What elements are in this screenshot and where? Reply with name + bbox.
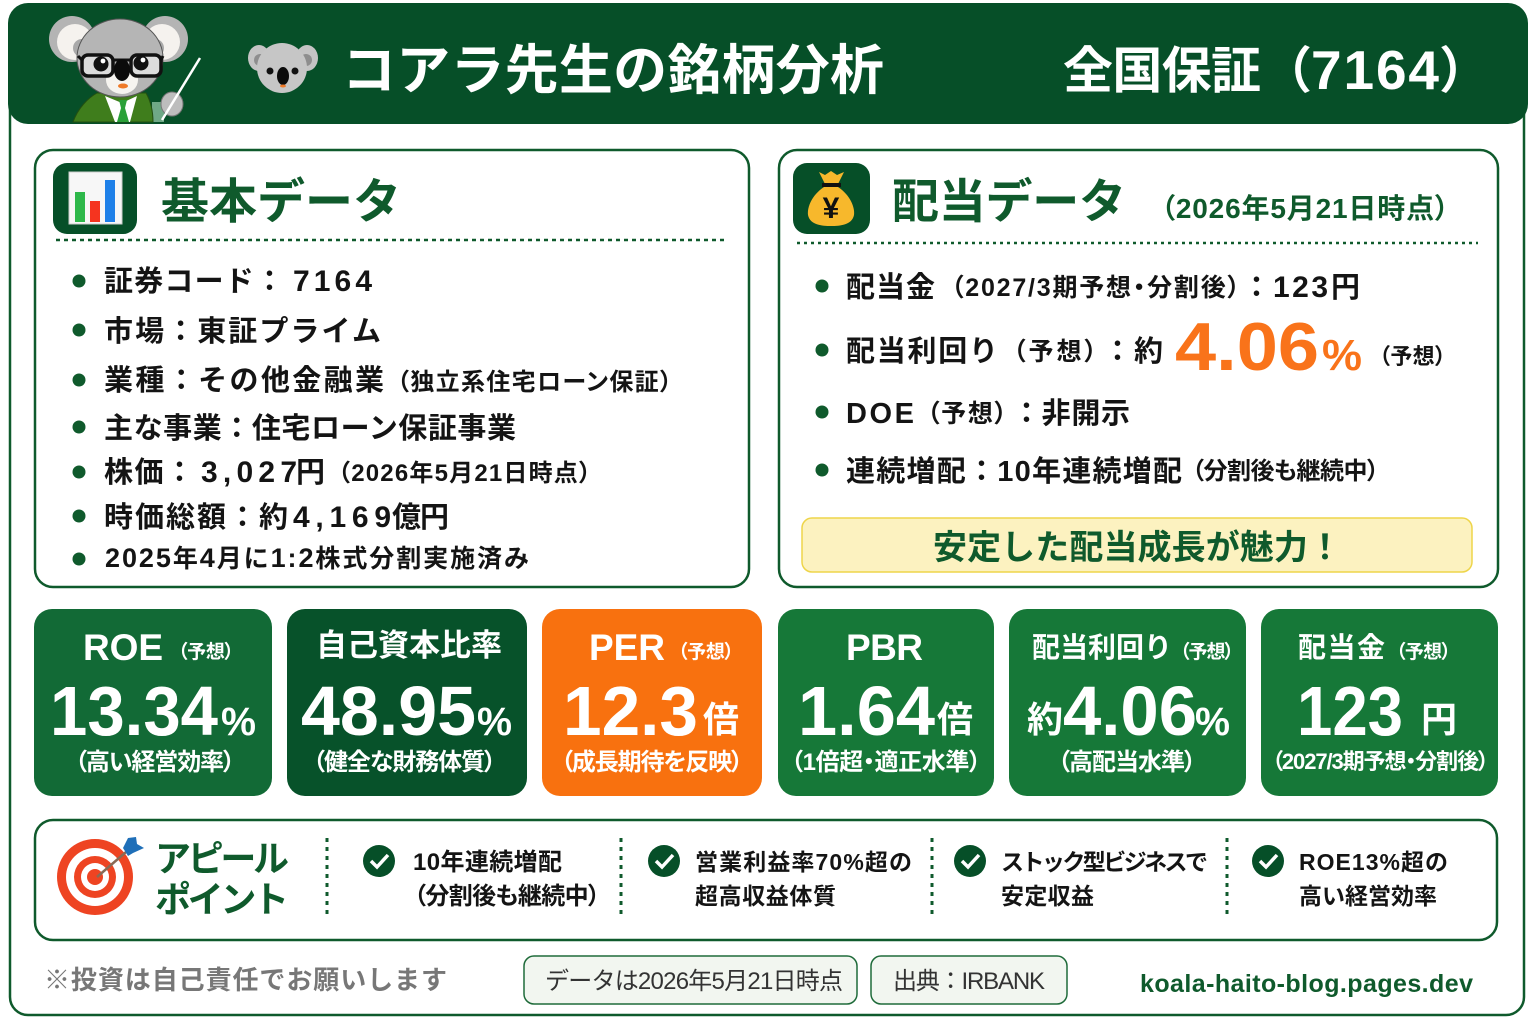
card: dividend yield: 4.06 [1063, 672, 1197, 750]
list: dividend data [816, 271, 1446, 488]
card: equity ratio: 48.95 [301, 672, 476, 750]
list: dividend data: DOE [846, 398, 914, 430]
list: basic data: 2025年4月に1:2株式分割実施済み [105, 543, 529, 573]
header band [8, 3, 1528, 124]
list: dividend data: 4.06 [1175, 309, 1319, 385]
list: dividend data: 円 [1331, 272, 1360, 304]
callout: stable dividend growth [802, 518, 1472, 572]
card: dividend yield: 約 [1027, 699, 1063, 740]
card: dividend yield [1009, 609, 1246, 796]
card: PER: （予想） [678, 641, 734, 663]
panel: appeal points [35, 820, 1497, 940]
list: basic data: 業種：その他金融業 [104, 364, 384, 397]
list: basic data: 3,027 [201, 456, 297, 489]
card: dividend yield: % [1195, 700, 1230, 744]
icon: money bag: ¥ [823, 192, 840, 225]
card: dividend: （2027/3期予想・分割後） [1272, 749, 1489, 774]
card: PBR [778, 609, 994, 796]
heading: basic data: 基本データ [161, 176, 401, 229]
stock name [1063, 39, 1489, 101]
list: dividend data: 配当金 [846, 271, 935, 304]
card: dividend: 円 [1421, 699, 1457, 740]
point 4: 高い経営効率 [1299, 883, 1437, 909]
icon: money bag [793, 163, 870, 234]
card: dividend [1261, 609, 1498, 796]
list: dividend data: ：約 [1103, 335, 1163, 368]
card: ROE: % [221, 700, 256, 744]
card: dividend yield: （高配当水準） [1058, 749, 1196, 776]
list: dividend data: ： [1242, 272, 1271, 304]
point 4 [1252, 845, 1448, 909]
point 2: 超高収益体質 [695, 883, 836, 909]
footer source badge: 出典：IRBANK [893, 968, 1045, 995]
footer source badge [871, 956, 1067, 1004]
point 1: （分割後も継続中） [414, 883, 600, 910]
point 1 [363, 845, 600, 910]
card: PBR: 1.64 [798, 672, 935, 750]
list: basic data: （独立系住宅ローン保証） [397, 369, 672, 396]
icon: koala teacher [49, 16, 200, 122]
footer disclaimer: ※投資は自己責任でお願いします [44, 965, 447, 995]
point 2 [648, 845, 912, 909]
card: PER: 倍 [703, 699, 739, 740]
footer url: koala-haito-blog.pages.dev [1140, 970, 1473, 998]
card: ROE: ROE [83, 627, 163, 668]
list: basic data: 4,169 [293, 501, 391, 534]
card: PER: （成長期待を反映） [561, 749, 743, 776]
card: ROE: 13.34 [50, 672, 218, 750]
card: PER [542, 609, 762, 796]
card: equity ratio: 自己資本比率 [316, 628, 502, 663]
list: basic data: （2026年5月21日時点） [338, 460, 591, 487]
footer date badge: データは2026年5月21日時点 [545, 968, 843, 995]
card: dividend yield: （予想） [1180, 641, 1234, 663]
list: basic data: 円 [296, 457, 325, 489]
list: basic data: 7164 [293, 265, 372, 298]
list: dividend data: 123 [1273, 271, 1328, 304]
point 3 [954, 845, 1208, 909]
list: dividend data: 連続増配：10年連続増配 [846, 455, 1182, 488]
card: PBR: （1倍超・適正水準） [791, 749, 981, 776]
card: equity ratio [287, 609, 527, 796]
heading: dividend data: 配当データ [892, 175, 1126, 228]
point 2: 営業利益率70%超の [695, 849, 912, 875]
list: basic data: 株価： [104, 456, 194, 489]
icon: bar chart [53, 163, 137, 234]
list: dividend data: % [1322, 331, 1362, 380]
heading: appeal points [155, 838, 289, 920]
card: PBR: 倍 [937, 699, 973, 740]
card: dividend: 配当金 [1298, 632, 1385, 663]
list: dividend data: （予想） [1013, 338, 1097, 366]
list: basic data: 証券コード： [104, 265, 284, 298]
card: dividend: （予想） [1396, 641, 1451, 663]
list: basic data: 億円 [392, 501, 449, 534]
card: PER: PER [589, 627, 665, 668]
panel: basic data [35, 150, 749, 587]
heading: appeal points: アピール [155, 838, 289, 879]
point 3: ストック型ビジネスで [1001, 849, 1208, 875]
list: basic data: 時価総額：約 [104, 501, 288, 534]
heading: appeal points: ポイント [155, 879, 289, 920]
stock name: （ [1262, 43, 1312, 99]
stock name: ） [1439, 43, 1489, 99]
point 1: 10年連続増配 [413, 849, 562, 876]
card: dividend yield: 配当利回り [1032, 632, 1172, 663]
list: basic data [72, 265, 672, 573]
icon: target [57, 837, 144, 915]
list: dividend data: ：非開示 [1012, 397, 1130, 430]
panel: dividend data [779, 150, 1498, 587]
stock name: 全国保証 [1063, 43, 1261, 99]
list: dividend data: （2027/3期予想・分割後） [951, 274, 1240, 302]
list: dividend data: （分割後も継続中） [1192, 458, 1379, 485]
list: basic data: 市場：東証プライム [104, 315, 381, 348]
card: ROE: （高い経営効率） [75, 749, 235, 776]
stock name: 7164 [1311, 39, 1439, 101]
card: dividend: 123 [1297, 672, 1403, 750]
list: dividend data: （予想） [927, 400, 1007, 428]
card: equity ratio: （健全な財務体質） [313, 749, 496, 776]
list: dividend data: 配当利回り [846, 335, 998, 368]
card: PBR: PBR [846, 627, 923, 668]
card: PER: 12.3 [563, 672, 698, 750]
point 4: ROE13%超の [1299, 849, 1448, 875]
list: basic data: 主な事業：住宅ローン保証事業 [104, 412, 516, 445]
icon: koala face [248, 43, 318, 93]
list: dividend data: （予想） [1379, 344, 1446, 369]
point 3: 安定収益 [1001, 883, 1094, 909]
title: コアラ先生の銘柄分析 [342, 41, 884, 101]
callout: stable dividend growth: 安定した配当成長が魅力！ [933, 528, 1342, 567]
heading date: （2026年5月21日時点） [1161, 193, 1449, 224]
card: equity ratio: % [477, 700, 512, 744]
card: ROE [34, 609, 272, 796]
footer date badge [524, 956, 857, 1004]
card: ROE: （予想） [178, 641, 234, 663]
